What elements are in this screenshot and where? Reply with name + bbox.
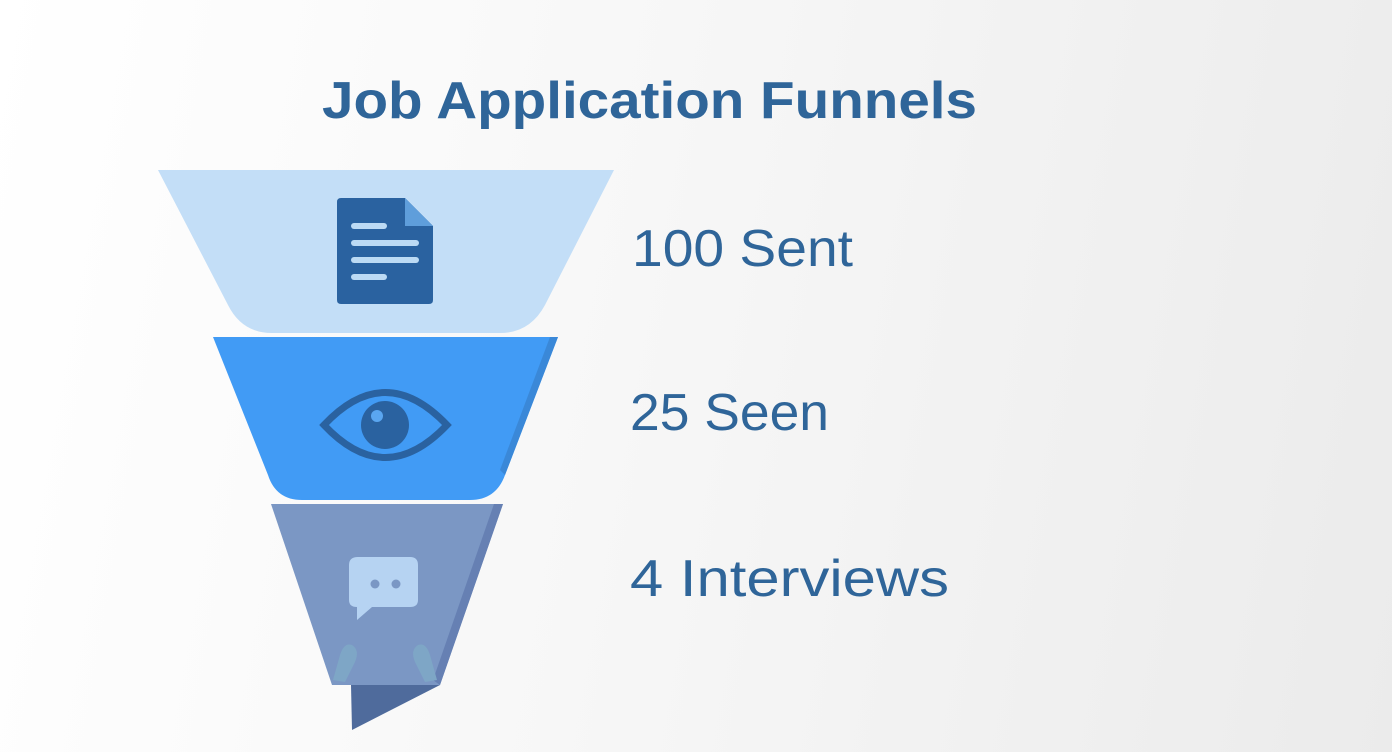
icon: eye — [324, 392, 447, 458]
icon: chat bubble — [349, 557, 418, 620]
label: 4 interviews: 4 Interviews — [630, 550, 949, 608]
funnel stage 1: sent — [158, 170, 614, 333]
title: Job Application Funnels — [322, 72, 977, 130]
funnel stage 2: seen — [213, 337, 558, 500]
panel: funnel — [158, 170, 614, 730]
funnel stage 3: interviews — [271, 504, 503, 685]
icon: document — [337, 198, 433, 304]
icon: hands — [333, 644, 437, 682]
label: 25 seen: 25 Seen — [630, 384, 829, 442]
label: 100 sent: 100 Sent — [632, 220, 854, 278]
funnel tip — [351, 685, 440, 730]
